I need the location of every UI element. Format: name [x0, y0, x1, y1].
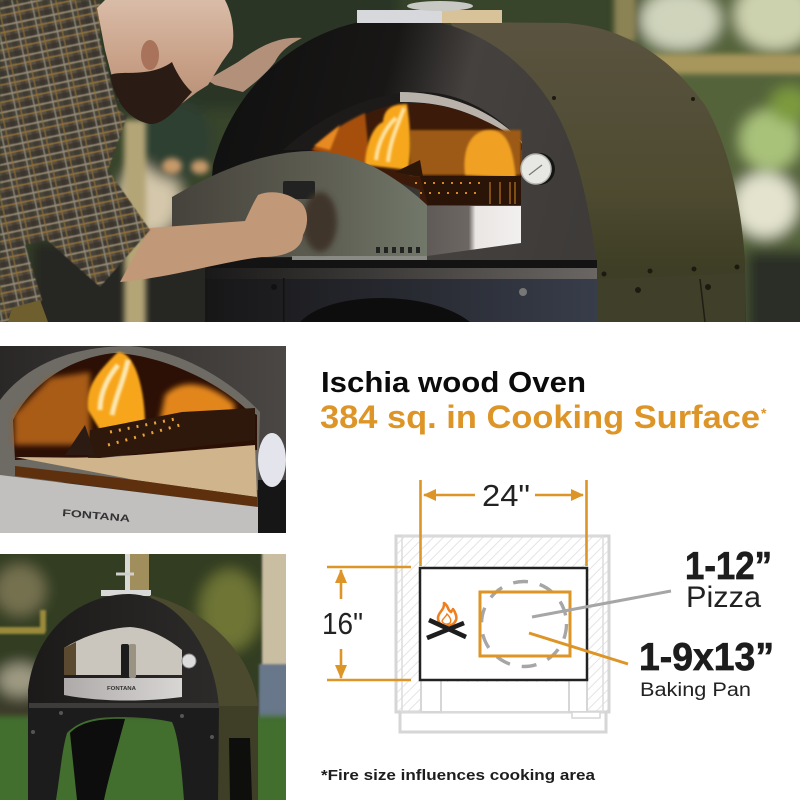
- man's far hand on oven: [207, 38, 302, 92]
- steel tray with brand: [64, 678, 182, 701]
- label: baking pan size: Baking Pan: [640, 680, 751, 701]
- label: pizza size: [685, 545, 772, 614]
- footnote: *Fire size influences cooking area: [321, 767, 596, 784]
- man's beard: [110, 62, 192, 124]
- icon: campfire: [427, 603, 466, 638]
- background foliage: [0, 554, 264, 721]
- chimney base plate: [357, 1, 502, 23]
- pull-out steel tray: [426, 206, 521, 256]
- oven interior flames: [13, 352, 257, 460]
- man's head: [97, 0, 234, 104]
- dimension: depth 16 inches: 16": [322, 606, 363, 641]
- wooden fence posts: [124, 0, 800, 342]
- footnote asterisk: *: [761, 405, 767, 421]
- thermometer: [258, 433, 286, 487]
- oven size diagram: [322, 478, 774, 732]
- stand: [28, 703, 258, 800]
- label: baking pan size: [639, 636, 774, 701]
- fence and tree trunk: [0, 544, 292, 720]
- dimension: width 24 inches: 24": [482, 478, 530, 513]
- cooking surface rectangle: [420, 568, 587, 680]
- label: baking pan size: 1-9x13”: [639, 636, 774, 679]
- photo background foliage: [0, 0, 800, 322]
- brand text: FONTANA: [62, 508, 130, 525]
- oven opening trim: [283, 92, 522, 150]
- oven front arch: [212, 22, 596, 260]
- oven base band: [205, 96, 745, 322]
- oven door: [172, 151, 427, 262]
- chimney: [101, 554, 151, 596]
- label: pizza size: 1-12”: [685, 545, 772, 588]
- oven face: [0, 346, 286, 507]
- heading: cooking surface: 384 sq. in Cooking Surface: [320, 399, 760, 435]
- pizza leader line: [532, 591, 671, 617]
- thermometer gauge: [521, 153, 555, 185]
- man's plaid shirt: [0, 0, 150, 322]
- photo: full oven on stand: [0, 554, 286, 800]
- heading: product name: Ischia wood Oven: [321, 367, 586, 399]
- oven side: [150, 595, 258, 712]
- grass: [0, 716, 306, 800]
- door handle: [121, 644, 136, 678]
- glowing gap: [15, 466, 257, 507]
- oven front arch: [28, 594, 219, 708]
- oven outline with insulated walls: [396, 536, 609, 732]
- photo: man opening the oven door: [0, 0, 800, 322]
- baking stone: [15, 445, 257, 497]
- right dark side: [258, 480, 286, 533]
- pizza dashed circle: [482, 582, 566, 666]
- oven fire interior: [310, 103, 521, 205]
- photo: oven interior close-up: [0, 346, 286, 533]
- arch trim: [0, 346, 260, 490]
- man's forearm and hand: [120, 192, 307, 282]
- dimension: width 24 inches: [420, 478, 586, 566]
- oven door window: [64, 627, 182, 675]
- label: pizza size: Pizza: [686, 581, 761, 614]
- dimension: depth 16 inches: [322, 567, 411, 680]
- baking pan rectangle: [480, 592, 570, 656]
- man's ear: [141, 40, 159, 70]
- steel front panel: [0, 475, 258, 533]
- oven side panel: [450, 22, 746, 322]
- baking pan leader line: [529, 633, 628, 664]
- perforated fire tray: [65, 408, 255, 458]
- man's trousers: [8, 300, 48, 322]
- steel tray with brand: FONTANA: [107, 686, 136, 692]
- thermometer: [182, 654, 196, 668]
